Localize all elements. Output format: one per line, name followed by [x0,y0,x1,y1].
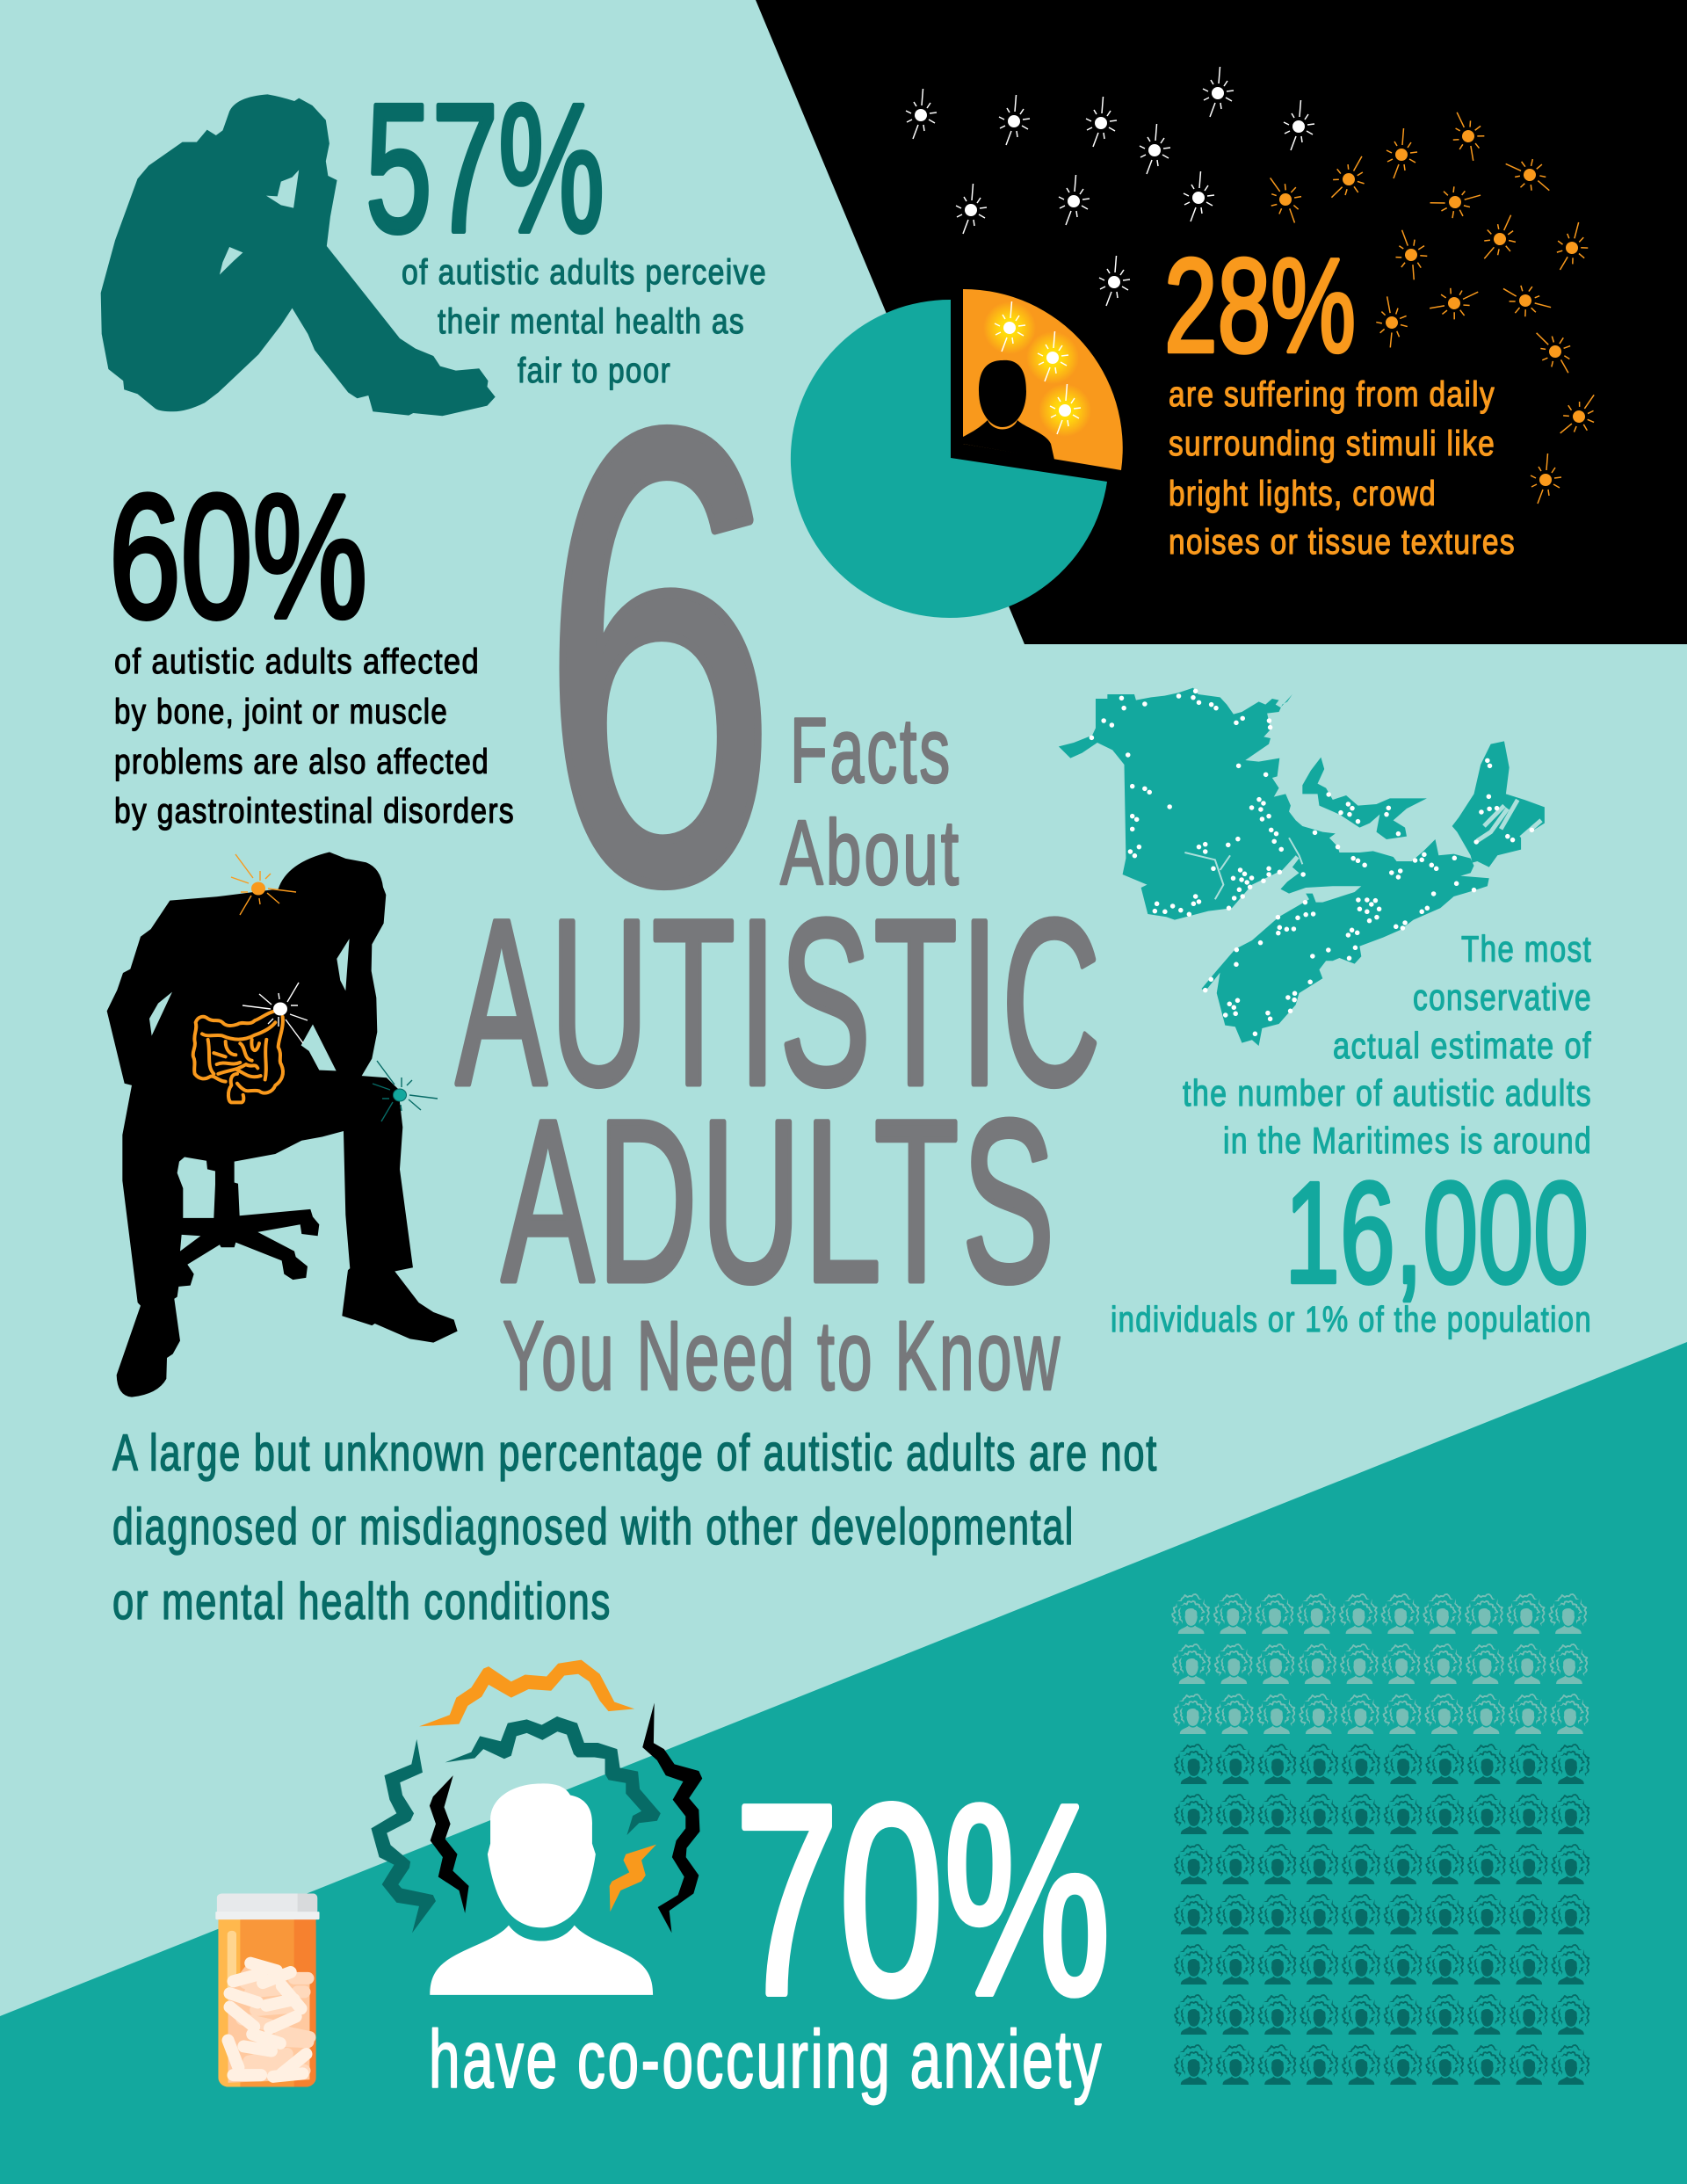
chart: pie showing 28% [791,289,1123,618]
pie: orange 28% wedge [963,289,1123,470]
chart: 10 by 10 pictogram of anxious people [1171,1593,1589,2085]
text: undiagnosed statement [112,1425,1158,1630]
jagged black left [430,1775,469,1913]
stat: 28%: 28% [1164,231,1356,381]
text: undiagnosed statement: diagnosed or misdiagnosed with other developmental [112,1498,1075,1556]
text: 60% description: problems are also affected [114,743,489,781]
icon: knee pain burst [373,1061,438,1121]
title: 6 Facts About Autistic Adults You Need to Know: ADULTS [502,1072,1058,1330]
icon: anxious person with jagged lines [371,1660,702,1995]
map: New Brunswick and Nova Scotia [1059,688,1489,1046]
silhouette: seated man [107,852,458,1397]
text: undiagnosed statement: or mental health conditions [112,1573,612,1630]
title: 6 Facts About Autistic Adults You Need to Know: Facts [790,700,952,802]
text: have co-occuring anxiety: have co-occuring anxiety [429,2013,1104,2105]
panel: black sensory background [756,0,1687,644]
text: Maritimes estimate: in the Maritimes is around [1223,1120,1592,1161]
text: 57% description: their mental health as [438,302,745,341]
map: Cape Breton [1452,741,1545,867]
text: 60% description: by bone, joint or muscle [114,693,448,731]
icon: glowing lights [983,301,1091,437]
text: Maritimes estimate: conservative [1413,976,1592,1018]
text: 57% description [402,253,767,390]
stat: 60%: 60% [109,459,367,655]
map: white population dots [1091,691,1531,1034]
stars: white and orange stimuli [906,67,1606,504]
stat: 57%: 57% [366,67,605,271]
title: 6 Facts About Autistic Adults You Need to Know: 6 [541,297,777,1016]
icon: sitting person with head in hands [101,94,496,416]
text: Maritimes estimate: actual estimate of [1333,1025,1592,1066]
pie: teal remainder [791,300,1107,618]
title: 6 Facts About Autistic Adults You Need to Know [456,297,1104,1411]
map: Maritime provinces with dots [1059,688,1545,1046]
text: 28% description [1169,375,1516,562]
map: Prince Edward Island [1302,758,1427,839]
title: 6 Facts About Autistic Adults You Need to Know: AUTISTIC [456,870,1104,1134]
icon: man on office chair with hurting spots [107,852,458,1397]
text: 28% description: noises or tissue textures [1169,523,1516,562]
icon: shoulder pain burst [231,854,296,915]
icon: person silhouette in wedge [963,360,1054,460]
icon: stomach pain burst [243,983,308,1043]
text: 60% description [114,642,515,831]
text: Maritimes estimate [1183,928,1592,1161]
head and shoulders [430,1783,653,1995]
stat: 70%: 70% [735,1749,1111,2051]
map: lakes and rivers [1184,800,1541,899]
dark rows: 70 people [1174,1744,1589,2085]
jagged black right [642,1702,702,1933]
light rows: 30 people [1171,1593,1589,1734]
bottle cap [215,1893,320,1919]
text: 57% description: fair to poor [518,352,671,390]
text: Maritimes estimate: the number of autistic adults [1183,1072,1592,1114]
text: 60% description: by gastrointestinal disorders [114,792,515,831]
text: Maritimes estimate: The most [1461,928,1592,969]
jagged dark left [371,1739,436,1933]
jagged orange top [419,1660,634,1726]
text: undiagnosed statement: A large but unknown percentage of autistic adults are not [112,1425,1158,1482]
orange lightning bolt [610,1845,656,1912]
text: 28% description: surrounding stimuli like [1169,424,1495,463]
capsules [228,1962,309,2083]
icon: intestines [193,1011,283,1102]
text: 28% description: bright lights, crowd [1169,475,1437,513]
text: 57% description: of autistic adults perceive [402,253,767,292]
text: 28% description: are suffering from daily [1169,375,1495,414]
text: 60% description: of autistic adults affected [114,642,480,681]
title: 6 Facts About Autistic Adults You Need to Know: About [780,802,961,904]
panel: teal bottom background [0,1342,1687,2184]
jagged dark arc [445,1716,661,1835]
title: 6 Facts About Autistic Adults You Need to Know: You Need to Know [503,1301,1062,1411]
bottle body [218,1916,316,2087]
icon: pill bottle [215,1893,320,2087]
